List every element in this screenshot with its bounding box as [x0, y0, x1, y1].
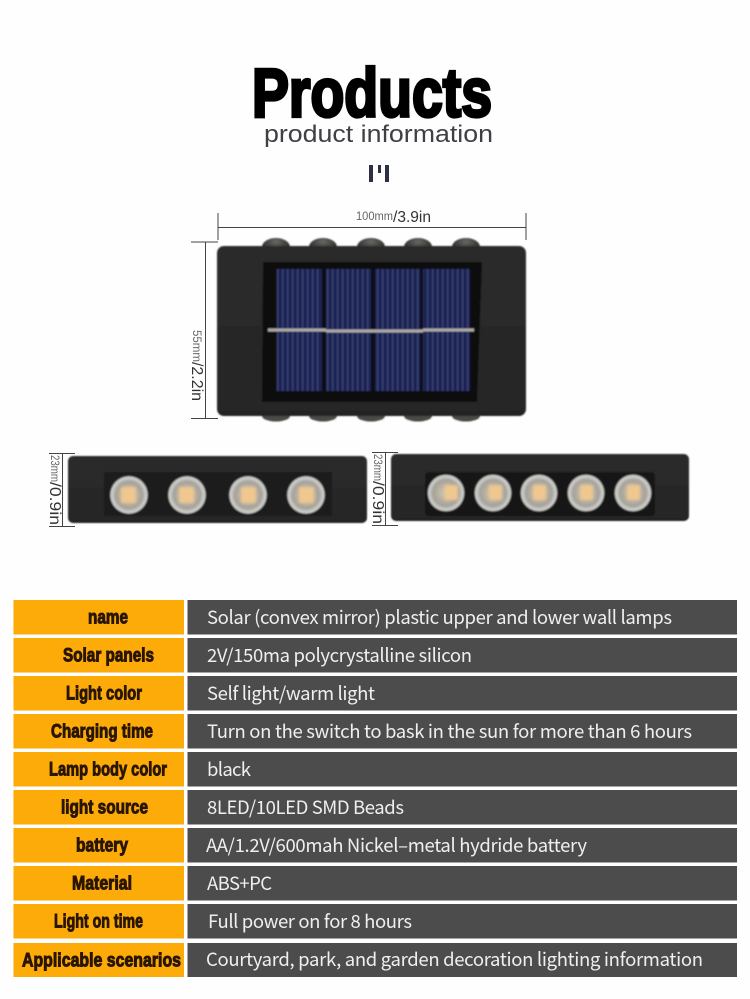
LED 3 — [520, 474, 558, 512]
panel recess — [262, 262, 482, 402]
title: Products — [252, 54, 492, 132]
bottom lamp bumps — [262, 410, 480, 422]
dimension: left side height — [46, 453, 75, 526]
row: lamp body color — [14, 752, 737, 786]
icon: title mark — [369, 165, 389, 182]
row: material: ABS+PC — [207, 870, 272, 896]
dimension: height: 55mm — [190, 330, 202, 362]
dimension: right side height: 23mm — [371, 454, 383, 481]
row: light on time: Full power on for 8 hours — [208, 908, 412, 934]
row: light color — [14, 676, 737, 710]
dimension: left side height: /0.9in — [46, 482, 63, 525]
LED 4 — [568, 474, 604, 512]
row: name — [14, 600, 737, 634]
row: material: Material — [72, 872, 132, 894]
dimension: left side height: 23mm — [48, 455, 60, 482]
row: applicable scenarios: Applicable scenarios — [22, 950, 181, 972]
product: front view with solar panel — [217, 238, 526, 422]
row: solar panels: Solar panels — [63, 644, 154, 666]
LED 2 — [168, 476, 206, 514]
row: light color: Self light/warm light — [207, 680, 375, 706]
product: side view 4 LEDs — [68, 456, 367, 523]
top lamp bumps — [262, 238, 480, 256]
row: solar panels: 2V/150ma polycrystalline silicon — [207, 642, 472, 668]
row: material — [14, 866, 737, 900]
dimension: width: 100mm — [356, 211, 393, 223]
row: charging time — [14, 714, 737, 748]
product: side view 5 LEDs — [391, 454, 689, 521]
dimension: right side height: /0.9in — [369, 481, 386, 524]
row: battery: battery — [76, 834, 128, 856]
subtitle: product information — [264, 121, 493, 148]
row: light on time — [14, 904, 737, 938]
row: name: name — [88, 606, 128, 628]
row: light color: Light color — [66, 682, 142, 704]
LED 1 — [110, 476, 148, 514]
row: name: Solar (convex mirror) plastic upper and lower wall lamps — [207, 604, 672, 630]
row: lamp body color: Lamp body color — [49, 758, 167, 780]
dimension: right side height — [369, 452, 398, 526]
row: battery — [14, 828, 737, 862]
specification table — [14, 600, 737, 977]
dimension: height: /2.2in — [188, 362, 205, 401]
busbar — [268, 328, 474, 332]
LED 3 — [229, 476, 267, 514]
row: battery: AA/1.2V/600mah Nickel–metal hydride battery — [206, 832, 587, 858]
row: applicable scenarios: Courtyard, park, and garden decoration lighting information — [206, 946, 703, 972]
dimension: width: /3.9in — [393, 209, 431, 226]
row: solar panels — [14, 638, 737, 672]
row: charging time: Turn on the switch to bask in the sun for more than 6 hours — [207, 718, 692, 744]
LED 4 — [287, 476, 325, 514]
row: charging time: Charging time — [51, 720, 153, 742]
dimension: width — [218, 209, 526, 240]
row: applicable scenarios — [14, 943, 737, 977]
LED 2 — [474, 474, 512, 512]
row: light source — [14, 790, 737, 824]
row: light source: light source — [61, 796, 148, 818]
LED 5 — [614, 474, 652, 512]
row: light source: 8LED/10LED SMD Beads — [207, 794, 404, 820]
row: lamp body color: black — [207, 756, 252, 782]
dimension: height — [188, 242, 218, 418]
LED 1 — [428, 474, 464, 512]
solar cells — [277, 269, 470, 391]
lamp body — [217, 246, 526, 416]
row: light on time: Light on time — [54, 910, 143, 932]
